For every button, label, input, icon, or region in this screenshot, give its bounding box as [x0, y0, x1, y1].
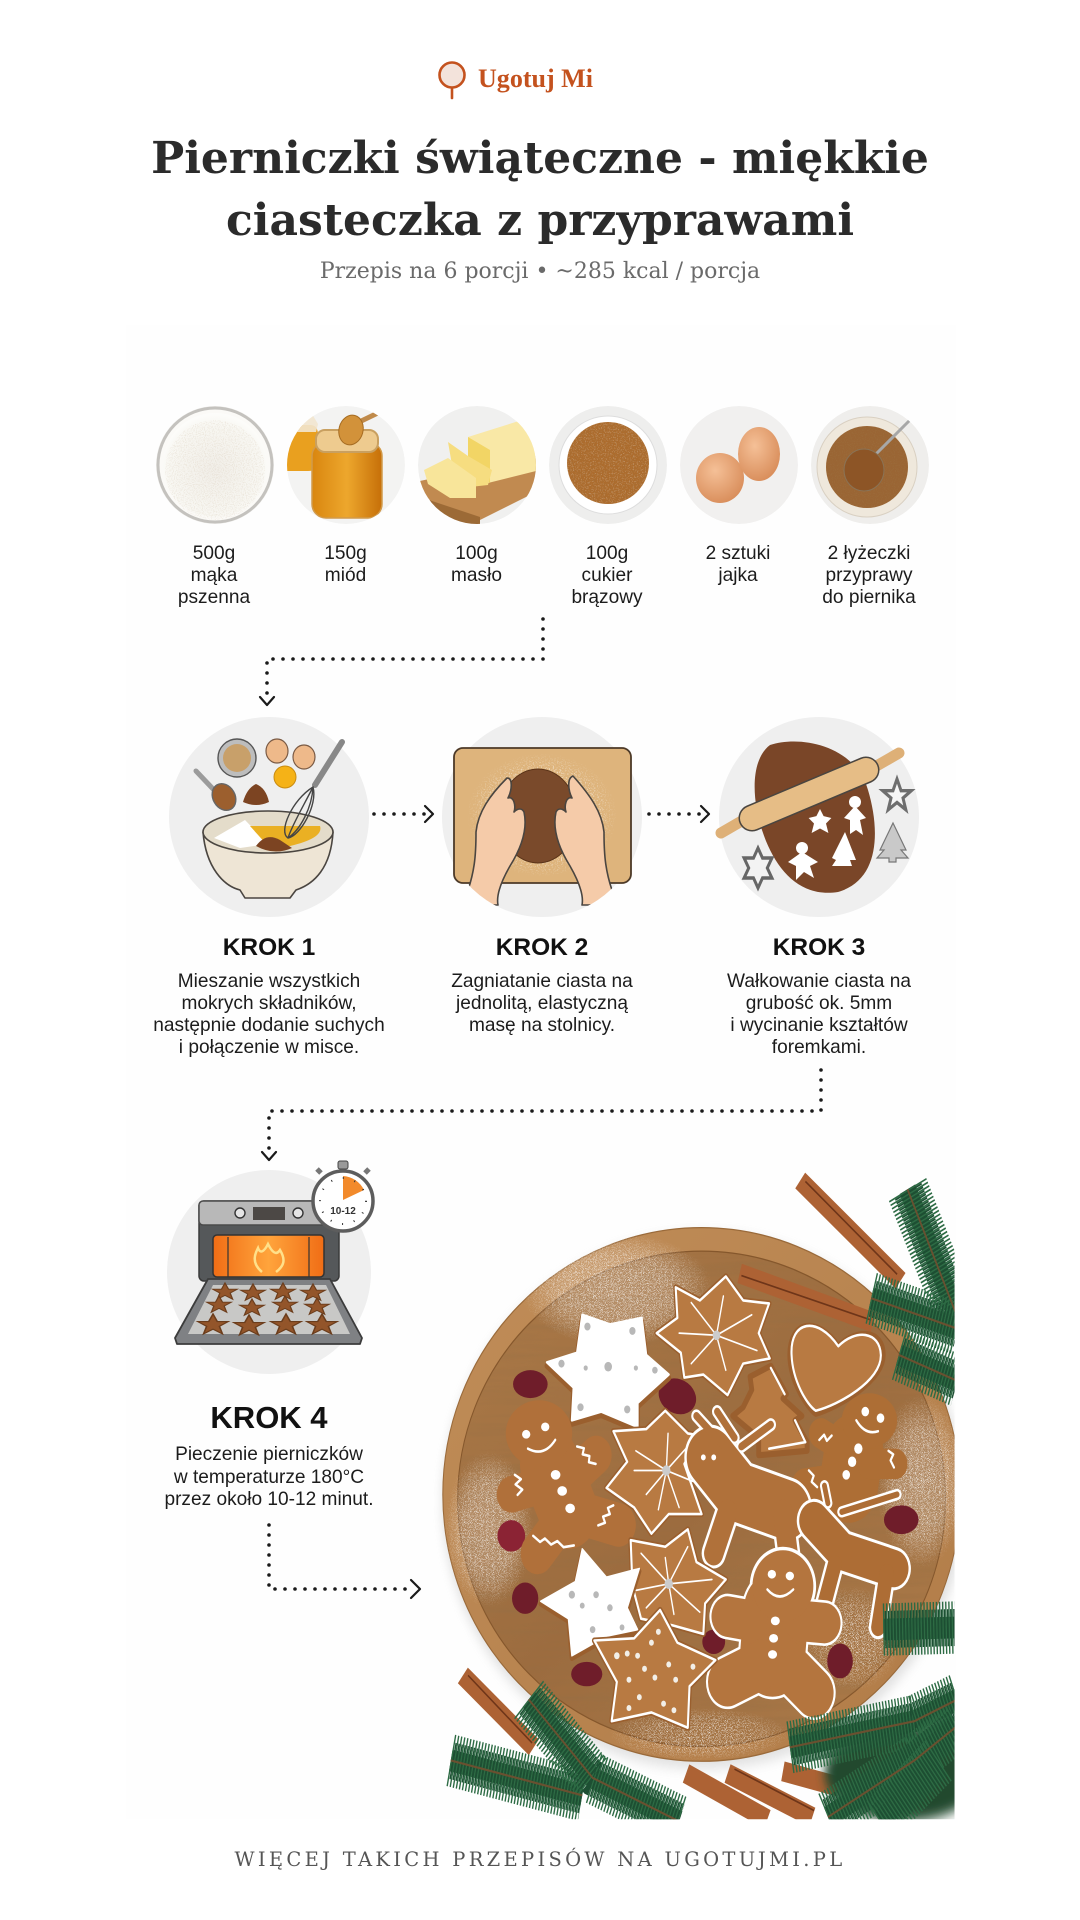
arrow: step 4 to finished cookies — [269, 1525, 420, 1598]
step 4 text: przez około 10-12 minut. — [164, 1489, 374, 1510]
icon: spoon logo — [440, 62, 464, 98]
photo: gingerbread cookies on wooden plate — [442, 1181, 984, 1821]
ingredient: eggs: 2 sztuki — [706, 543, 770, 564]
step 3 text: Wałkowanie ciasta na — [727, 971, 911, 992]
cookie: white iced star — [547, 1315, 669, 1430]
ingredient: butter — [415, 406, 540, 586]
subtitle: Przepis na 6 porcji • ~285 kcal / porcja — [320, 259, 760, 284]
step 1 text: następnie dodanie suchych — [153, 1015, 385, 1036]
ingredient: brown sugar: 100g — [586, 543, 628, 564]
step 4 text: w temperaturze 180°C — [173, 1467, 364, 1488]
step 2 heading: KROK 2 — [496, 934, 588, 961]
ingredient: gingerbread spice: 2 łyżeczki — [828, 543, 910, 564]
cookie: reindeer centre — [696, 1412, 788, 1553]
title: ciasteczka z przyprawami — [226, 195, 854, 246]
cinnamon stick on plate — [740, 1273, 873, 1322]
ingredient: gingerbread spice: przyprawy — [825, 565, 913, 586]
step 1 text — [153, 971, 385, 1058]
ingredient: gingerbread spice: do piernika — [822, 587, 916, 608]
ingredient: gingerbread spice — [811, 406, 929, 608]
ingredient: brown sugar: brązowy — [571, 587, 643, 608]
ingredient: eggs — [680, 406, 798, 586]
pine branches — [451, 1189, 984, 1821]
step 4 heading: KROK 4 — [210, 1400, 328, 1435]
icon: stopwatch 10-12 — [313, 1161, 373, 1231]
cookie: snowflake star lower — [631, 1529, 726, 1634]
step 2 illustration: kneading — [442, 717, 642, 917]
arrow: ingredients to step 1 — [260, 619, 543, 705]
ingredient: brown sugar — [549, 406, 667, 608]
step 2 — [442, 717, 642, 1036]
ingredient: eggs: jajka — [717, 565, 758, 586]
title: Pierniczki świąteczne - miękkie — [151, 133, 929, 184]
cookie: heart — [790, 1326, 883, 1414]
ingredient: flour: 500g — [193, 543, 235, 564]
step 3 — [719, 717, 919, 1058]
ingredient: flour: pszenna — [178, 587, 250, 608]
step 1 text: i połączenie w misce. — [179, 1037, 359, 1058]
step 1 text: Mieszanie wszystkich — [178, 971, 360, 992]
ingredient: flour: mąka — [191, 565, 238, 586]
cinnamon stick: top right — [800, 1181, 901, 1281]
step 4 illustration: oven and timer — [167, 1161, 373, 1374]
step 4 text — [164, 1444, 374, 1510]
step 2 text: jednolitą, elastyczną — [455, 993, 628, 1014]
icon: stopwatch 10-12: 10-12 — [330, 1206, 356, 1217]
cookie: white star small — [541, 1549, 639, 1658]
arrow: step 1 to step 2 — [374, 806, 433, 822]
cookie: iced star with dots — [594, 1610, 715, 1728]
cookie: snowflake star — [657, 1276, 770, 1395]
cookie: reindeer right — [814, 1486, 897, 1627]
arrow: step 2 to step 3 — [649, 806, 709, 822]
arrow: step 3 to step 4 — [262, 1070, 821, 1160]
ingredient: honey: 150g — [324, 543, 367, 564]
ingredients row — [156, 406, 929, 608]
cookie: gingerbread man left — [506, 1400, 619, 1553]
wooden plate — [443, 1228, 966, 1761]
step 2 text: Zagniatanie ciasta na — [451, 971, 633, 992]
plate shadow — [440, 1286, 954, 1772]
step 1 text: mokrych składników, — [181, 993, 357, 1014]
cinnamon sticks bottom — [463, 1675, 838, 1819]
step 3 text: i wycinanie kształtów — [730, 1015, 908, 1036]
step 3 heading: KROK 3 — [773, 934, 865, 961]
ingredient: flour — [156, 406, 274, 608]
step 4 text: Pieczenie pierniczków — [175, 1444, 363, 1465]
step 2 text — [451, 971, 633, 1036]
step 1 — [153, 717, 385, 1058]
cookie: snowflake star centre — [606, 1411, 702, 1534]
step 3 text — [727, 971, 911, 1058]
step 2 text: masę na stolnicy. — [469, 1015, 615, 1036]
cookie: gingerbread man right — [805, 1393, 897, 1487]
step 3 illustration: rolling dough — [719, 717, 919, 917]
cranberries — [497, 1370, 919, 1686]
ingredient: honey — [286, 406, 405, 586]
ingredient: brown sugar: cukier — [582, 565, 633, 586]
oven body — [199, 1201, 339, 1281]
cookie: gingerbread man bottom — [728, 1547, 824, 1693]
logo — [440, 62, 593, 98]
ingredient: butter: masło — [451, 565, 502, 586]
title — [151, 133, 929, 246]
footer: WIĘCEJ TAKICH PRZEPISÓW NA UGOTUJMI.PL — [235, 1846, 845, 1871]
logo wordmark: Ugotuj Mi — [478, 64, 593, 93]
step 4 — [164, 1161, 374, 1510]
infographic panel backdrop — [126, 325, 956, 1819]
ingredient: honey: miód — [325, 565, 366, 586]
step 3 text: foremkami. — [772, 1037, 866, 1058]
cookie: tree — [733, 1366, 807, 1455]
step 3 text: grubość ok. 5mm — [746, 993, 892, 1014]
step 1 illustration: mixing bowl — [169, 717, 369, 917]
step 1 heading: KROK 1 — [223, 934, 315, 961]
ingredient: butter: 100g — [455, 543, 498, 564]
baking tray with cookies — [175, 1279, 362, 1344]
